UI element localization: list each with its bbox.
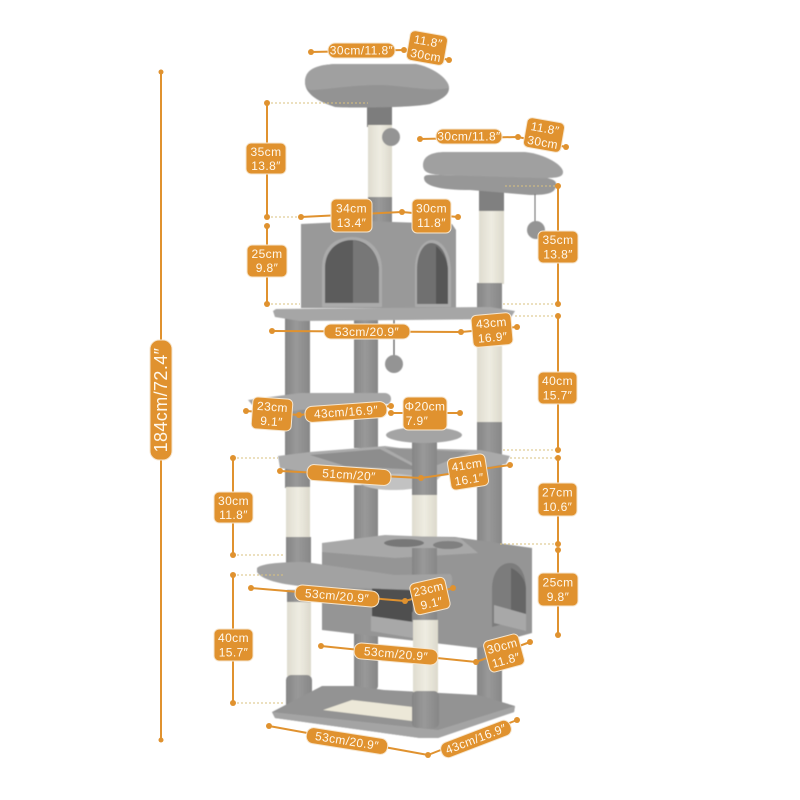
toy ball under platform xyxy=(385,320,403,373)
dimension: low shelf: 53cm/20.9″ xyxy=(304,586,370,606)
dimension: low shelf xyxy=(248,576,456,616)
dimension: upper condo: 13.4″ xyxy=(337,216,367,230)
dimension: total height 184cm: 184cm/72.4″ xyxy=(151,347,171,452)
dimension: 25cm right: 9.8″ xyxy=(547,590,570,604)
dimension: base: 43cm/16.9″ xyxy=(443,721,509,757)
top perch xyxy=(305,64,449,223)
upper platform xyxy=(273,307,515,321)
front post lower xyxy=(412,612,439,728)
base xyxy=(272,686,515,738)
dimension: hammock: 41cm xyxy=(451,456,483,474)
dimension: total height 184cm xyxy=(150,70,172,742)
dimension: round platform: Φ20cm xyxy=(405,400,445,414)
round platform xyxy=(386,427,462,443)
dimension: 40cm left xyxy=(214,572,253,706)
dimension: low shelf: 9.1″ xyxy=(419,594,445,613)
dimension: top perch width xyxy=(308,30,452,66)
dimension: top perch width: 30cm xyxy=(409,46,442,65)
rear and side posts xyxy=(285,318,502,711)
dimension: 40cm right xyxy=(538,313,577,453)
dimension: side shelf: 43cm/16.9″ xyxy=(313,403,379,421)
dimension: upper platform xyxy=(269,312,520,348)
low shelf xyxy=(257,562,452,592)
dimension: round platform: 7.9″ xyxy=(406,414,429,428)
dimension: 35cm left: 13.8″ xyxy=(251,159,281,173)
dimension: upper condo: 34cm xyxy=(336,202,367,216)
dimension: lower condo: 11.8″ xyxy=(490,650,522,671)
dimension: right perch width: 30cm xyxy=(526,133,559,152)
lower condo xyxy=(322,535,532,648)
front post middle xyxy=(412,548,437,578)
dimension: 40cm left: 15.7″ xyxy=(219,646,249,660)
dimension: upper condo: 30cm xyxy=(416,202,447,216)
dimension: round platform xyxy=(388,397,463,430)
dimension: right perch width: 11.8″ xyxy=(530,119,561,138)
dimension: lower condo xyxy=(318,633,533,673)
dimension: 25cm left: 9.8″ xyxy=(256,261,279,275)
dimension: side shelf: 9.1″ xyxy=(260,414,284,429)
front post upper xyxy=(412,474,437,548)
dimension: 35cm right xyxy=(538,183,578,307)
dimension: low shelf: 23cm xyxy=(412,579,445,599)
dimension: 25cm left xyxy=(247,223,287,307)
dimension: top perch width: 11.8″ xyxy=(413,32,444,51)
toy ball on right perch xyxy=(527,194,545,239)
upper condo xyxy=(301,221,456,308)
dimension: hammock: 16.1″ xyxy=(453,470,485,489)
dimension: 27cm right: 10.6″ xyxy=(543,500,573,514)
dimension: 25cm left: 25cm xyxy=(252,247,282,261)
dimension: upper platform: 43cm xyxy=(475,315,507,331)
dimension: base: 53cm/20.9″ xyxy=(314,729,380,753)
dimension: hammock: 51cm/20″ xyxy=(322,466,377,484)
dimension: lower condo: 53cm/20.9″ xyxy=(363,644,429,664)
dimension: right perch width xyxy=(417,117,569,153)
dimension: 35cm right: 13.8″ xyxy=(543,248,573,262)
dimension: 40cm right: 40cm xyxy=(542,374,573,388)
cat tree illustration xyxy=(248,64,563,738)
dimension: 27cm right: 27cm xyxy=(542,486,573,500)
dimension: 40cm right: 15.7″ xyxy=(543,388,573,402)
dotted guides xyxy=(233,103,558,703)
dimension: top perch width: 30cm/11.8″ xyxy=(330,44,394,58)
dimension: 27cm right xyxy=(538,455,577,547)
dimension: 30cm left: 30cm xyxy=(218,494,249,508)
dimension: side shelf: 23cm xyxy=(257,399,288,415)
dimension: lower condo: 30cm xyxy=(485,635,519,657)
dimension: 25cm right xyxy=(538,547,578,638)
dimension: side shelf xyxy=(243,397,394,431)
dimension: upper condo xyxy=(298,199,461,233)
dimension: upper condo: 11.8″ xyxy=(417,216,446,230)
dimension: upper platform: 16.9″ xyxy=(477,329,508,346)
dimension: 30cm left xyxy=(214,455,253,558)
dimension: 35cm left: 35cm xyxy=(251,145,281,159)
toy ball on top perch xyxy=(382,128,400,146)
dimension: right perch width: 30cm/11.8″ xyxy=(437,130,501,144)
dimension: base xyxy=(266,717,520,760)
dimension: 40cm left: 40cm xyxy=(218,631,249,645)
hammock xyxy=(278,442,510,490)
right perch xyxy=(423,152,563,311)
dimension: 30cm left: 11.8″ xyxy=(219,508,248,522)
dimension: 35cm left xyxy=(246,100,286,220)
small side shelf xyxy=(248,393,391,416)
dimension: upper platform: 53cm/20.9″ xyxy=(335,325,399,339)
dimension: hammock xyxy=(277,453,513,491)
dimension: 25cm right: 25cm xyxy=(543,576,573,590)
dimension: 35cm right: 35cm xyxy=(543,233,573,247)
